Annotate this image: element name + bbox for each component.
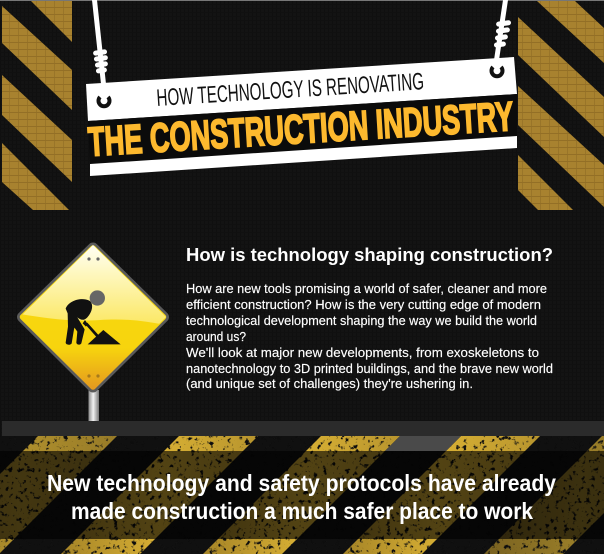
grey divider band [2, 421, 604, 436]
body text: We'll look at major new developments, from exoskeletons to [186, 345, 539, 360]
body text: nanotechnology to 3D printed buildings, and the brave new world [186, 361, 553, 376]
body text: (and unique set of challenges) they're ushering in. [186, 376, 473, 391]
body text: How are new tools promising a world of safer, cleaner and more [186, 281, 547, 296]
callout text: New technology and safety protocols have already [47, 470, 556, 496]
callout text [47, 470, 556, 524]
sign post [88, 390, 99, 422]
sign highlight [22, 245, 166, 324]
icon: diamond road sign [10, 240, 176, 387]
dark overlay band [0, 451, 604, 539]
left hook hole [98, 97, 110, 106]
sign bolts [87, 257, 100, 378]
left hazard stripes [2, 1, 72, 210]
body text: around us? [186, 329, 246, 344]
callout text: made construction a much safer place to work [71, 498, 534, 524]
title line one: HOW TECHNOLOGY IS RENOVATING [156, 68, 425, 112]
left hanging rope [92, 0, 108, 84]
body text [186, 281, 553, 391]
right hook hole [492, 67, 502, 76]
icon: worker shovelling [66, 290, 121, 345]
right hanging rope [494, 0, 511, 60]
grey worn patch [385, 436, 461, 451]
right hazard stripes [518, 1, 604, 210]
body text: technological development shaping the way we build the world [186, 313, 537, 328]
bottom hazard stripes [0, 436, 604, 554]
body text: efficient construction? How is the very cutting edge of modern [186, 297, 541, 312]
worn patches on stripes [0, 436, 604, 554]
heading: How is technology shaping construction? [186, 244, 553, 265]
title sign [86, 57, 517, 176]
